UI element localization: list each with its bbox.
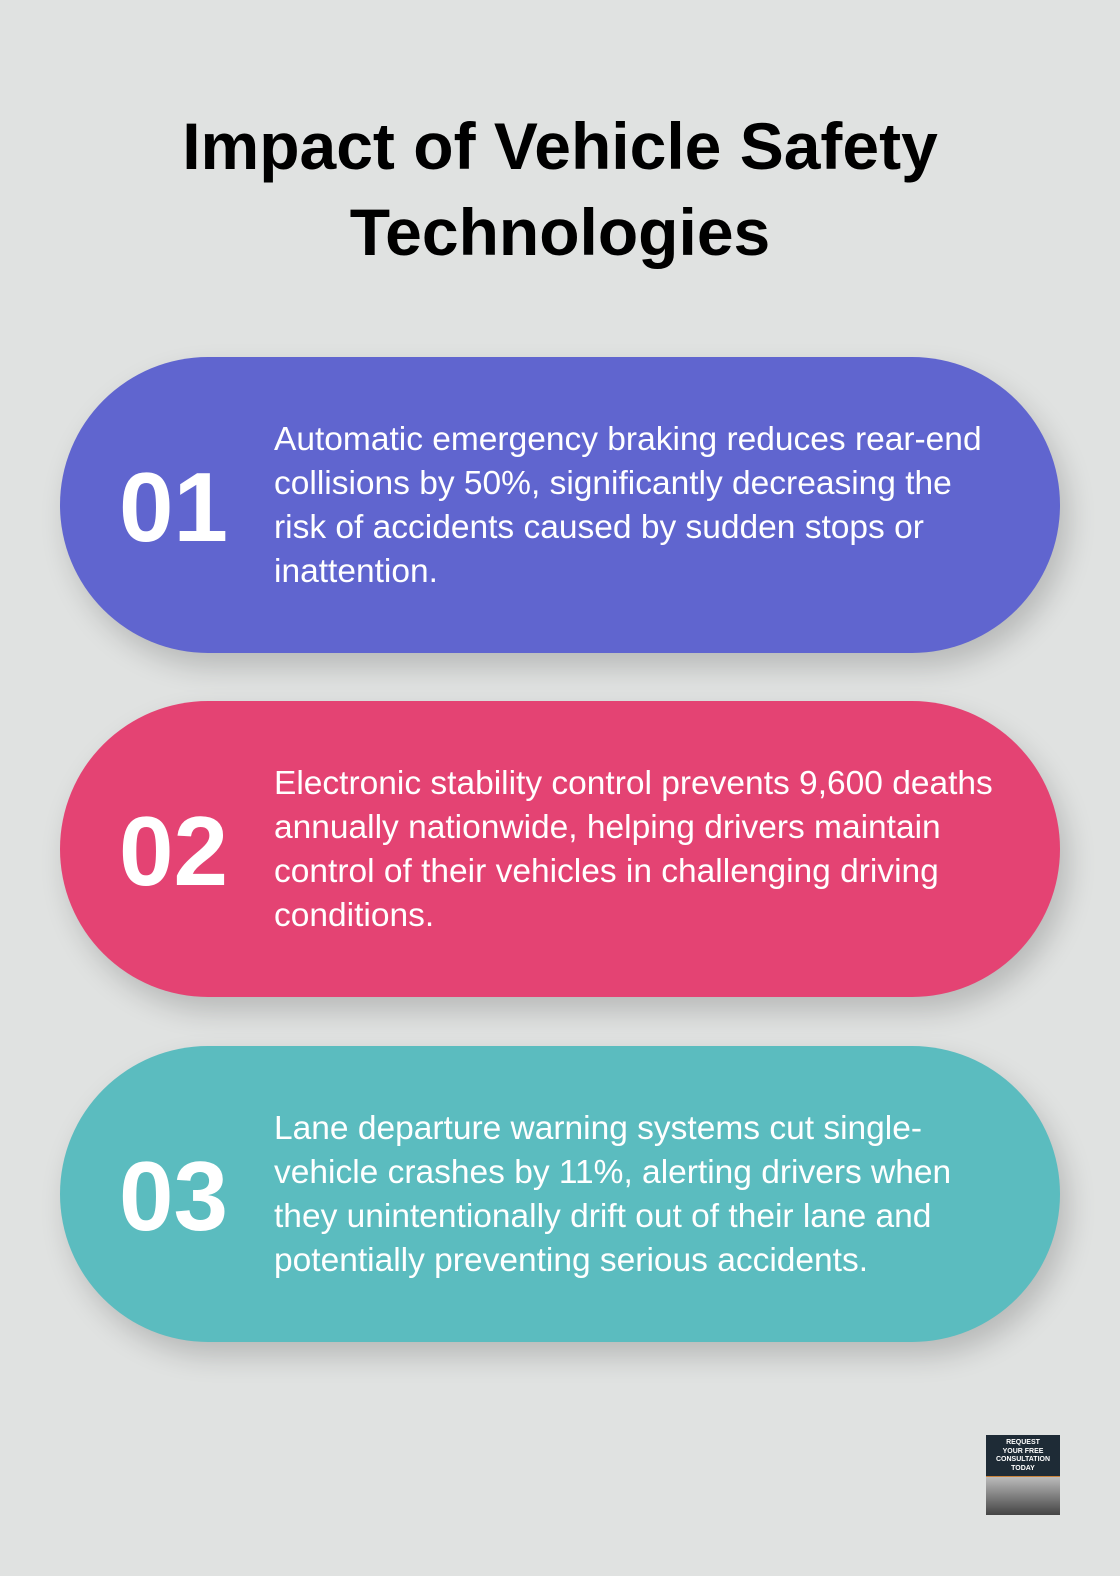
title [182,109,938,269]
badge: consultation: CONSULTATION [996,1456,1050,1463]
text 03: vehicle crashes by 11%, alerting drivers when [274,1154,951,1191]
text 01 [274,421,982,590]
text 01: inattention. [274,553,438,590]
badge: consultation: REQUEST [1006,1439,1040,1446]
title: Technologies [350,195,770,269]
badge: consultation: TODAY [1011,1464,1035,1472]
panel: item 02 [60,701,1060,997]
number 03: 03 [119,1141,228,1251]
text 02: Electronic stability control prevents 9,600 deaths [274,765,993,802]
number 01: 01 [119,452,228,562]
text 02 [274,765,993,934]
panel: item 01 [60,357,1060,653]
text 03: potentially preventing serious accidents. [274,1242,868,1279]
text 03 [274,1110,951,1279]
badge: consultation: YOUR FREE [1003,1448,1043,1454]
text 02: conditions. [274,897,434,934]
panel: item 03 [60,1046,1060,1342]
text 01: Automatic emergency braking reduces rear-end [274,421,982,458]
title: Impact of Vehicle Safety [182,109,938,183]
text 01: risk of accidents caused by sudden stops or [274,509,924,546]
number 02: 02 [119,796,228,906]
text 02: control of their vehicles in challenging driving [274,853,939,890]
text 03: Lane departure warning systems cut single- [274,1110,922,1147]
text 03: they unintentionally drift out of their lane and [274,1198,931,1235]
badge: consultation [986,1435,1060,1515]
text 01: collisions by 50%, significantly decreasing the [274,465,952,502]
text 02: annually nationwide, helping drivers maintain [274,809,941,846]
